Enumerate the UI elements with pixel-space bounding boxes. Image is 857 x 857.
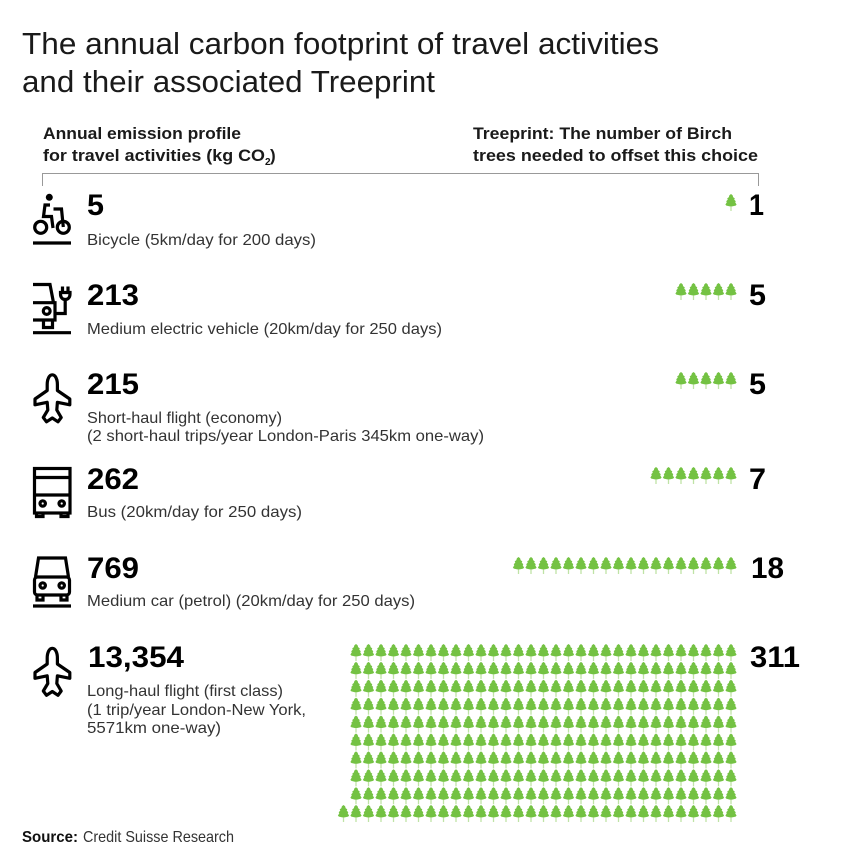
title [22,26,659,99]
column heading: emission profile [43,124,276,168]
trees: 1 [725,194,737,211]
description: short-haul flight: Short-haul flight (economy) [87,410,282,427]
icon: bicycle [33,194,71,243]
column heading: emission profile: ) [270,146,276,165]
column heading: emission profile: 2 [265,157,271,168]
value: 262 kg: 262 [87,463,139,496]
trees: 7 [650,467,737,484]
treeprint count: 5: 5 [749,368,766,401]
column heading: emission profile: Annual emission profile [43,124,241,143]
description: long-haul flight: 5571km one-way) [87,720,221,737]
description: short-haul flight [87,410,484,445]
description: bus: Bus (20km/day for 250 days) [87,504,302,521]
treeprint count: 1: 1 [749,189,764,222]
icon: plane [35,375,70,422]
description: long-haul flight: Long-haul flight (first class) [87,683,283,700]
icon: plane [35,648,70,695]
value: 215 kg: 215 [87,368,139,401]
source [22,829,234,846]
value: 213 kg: 213 [87,279,139,312]
description: bicycle: Bicycle (5km/day for 200 days) [87,232,316,249]
description: short-haul flight: (2 short-haul trips/year London-Paris 345km one-way) [87,428,484,445]
value: 13,354 kg: 13,354 [88,641,185,674]
trees: 5 [675,283,737,300]
trees: 18 [513,557,737,574]
value: 769 kg: 769 [87,552,139,585]
value: 5 kg: 5 [87,189,104,222]
source: Source: [22,829,78,846]
source: Credit Suisse Research [83,829,234,846]
treeprint count: 5: 5 [749,279,766,312]
treeprint count: 311: 311 [750,641,800,674]
treeprint count: 18: 18 [751,552,784,585]
column heading: treeprint: trees needed to offset this choice [473,146,758,165]
description: petrol car: Medium car (petrol) (20km/day for 250 days) [87,593,415,610]
description: long-haul flight [87,683,306,737]
icon: electric vehicle [33,284,71,333]
trees: 5 [675,372,737,389]
row: short-haul flight [35,368,766,445]
row: bicycle [33,189,764,249]
row: long-haul flight [35,641,800,822]
trees: 311 [338,644,737,822]
description: long-haul flight: (1 trip/year London-New York, [87,702,306,719]
row: bus [34,463,766,521]
row: electric vehicle [33,279,766,338]
title: and their associated Treeprint [22,64,435,99]
treeprint count: 7: 7 [749,463,766,496]
column heading: treeprint [473,124,758,165]
row: petrol car [33,552,784,610]
description: electric vehicle: Medium electric vehicle (20km/day for 250 days) [87,321,442,338]
icon: car [33,558,71,606]
column heading: treeprint: Treeprint: The number of Birch [473,124,732,143]
icon: bus [34,468,70,516]
title: The annual carbon footprint of travel activities [22,26,659,61]
column heading: emission profile: for travel activities (kg CO [43,146,265,165]
